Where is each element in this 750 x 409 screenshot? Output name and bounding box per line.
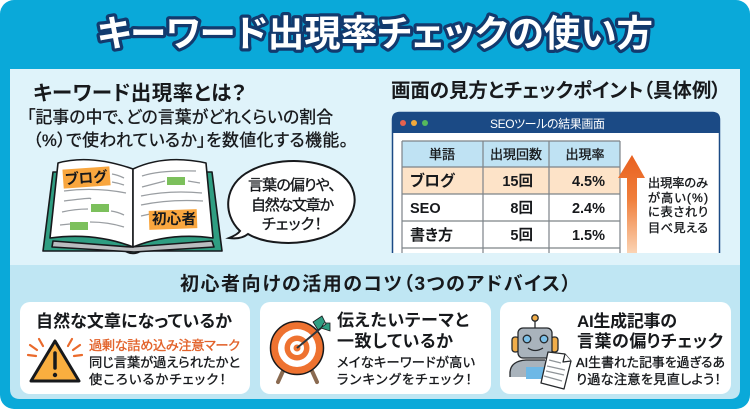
text block: arrow note: に表されり <box>648 205 708 219</box>
card heading: 言葉の偏りチェック <box>577 332 723 351</box>
table: 単語 <box>429 147 455 162</box>
card heading: 自然な文章になっているか <box>36 311 232 331</box>
card heading: AI生成記事の <box>577 311 677 331</box>
label: beginner: 初心者 <box>152 211 196 228</box>
card heading <box>337 311 469 351</box>
heading: what is keyword density: キーワード出現率とは？ <box>33 82 246 105</box>
card: natural writing <box>20 302 250 394</box>
arrow: rising rate <box>618 155 645 253</box>
card text <box>337 354 475 387</box>
icon: target with arrow <box>270 316 330 382</box>
card text: 使ころいるかチェック！ <box>89 371 226 387</box>
panel: tips <box>10 265 740 399</box>
table: 5回 <box>510 228 533 244</box>
window title: SEOツールの結果画面 <box>490 117 605 131</box>
label: blog: ブログ <box>64 167 109 188</box>
table: 4.5% <box>572 174 605 190</box>
icon: robot with document <box>510 315 571 389</box>
callout: speech bubble: チェック！ <box>262 216 322 233</box>
text block: arrow note: 出現率のみ <box>648 176 708 190</box>
table <box>402 141 620 260</box>
text block: definition: 「記事の中で、どの言葉がどれくらいの割合 <box>27 108 333 127</box>
icon: open book <box>43 160 222 254</box>
card heading: 伝えたいテーマと <box>337 311 469 330</box>
text block: arrow note <box>648 176 708 235</box>
callout: speech bubble: 自然な文章か <box>251 197 334 214</box>
icon: warning triangle <box>28 339 82 381</box>
text block: arrow note: 目べ見える <box>648 221 708 235</box>
table: SEO <box>410 201 441 217</box>
card text <box>576 355 725 387</box>
card text: AI生書れた記事を過ぎるあ <box>576 355 725 370</box>
table: 1.5% <box>572 228 605 244</box>
card text: メイなキーワードが高い <box>337 354 475 370</box>
card text <box>89 355 240 387</box>
card text: り過な注意を見直しよう！ <box>576 372 721 387</box>
callout: speech bubble <box>228 161 355 243</box>
table: 15回 <box>502 174 533 190</box>
card text: 同じ言葉が過えられたかと <box>89 355 240 370</box>
text block: definition: （%）で使われているか」を数値化する機能。 <box>33 130 348 150</box>
table: 8回 <box>510 201 533 217</box>
panel: upper explanation <box>10 69 740 272</box>
card heading <box>577 311 723 351</box>
title: キーワード出現率チェックの使い方 <box>97 13 653 54</box>
text block: definition <box>27 108 348 150</box>
heading: screen guide: 画面の見方とチェックポイント（具体例） <box>391 79 721 102</box>
text block: arrow note: が高い(%) <box>648 190 708 205</box>
callout: speech bubble: 言葉の偏りや、 <box>248 177 336 194</box>
card: AI article <box>500 302 731 394</box>
card heading: 一致しているか <box>337 332 453 351</box>
table: 2.4% <box>572 201 605 217</box>
window buttons <box>400 120 428 126</box>
heading: tips: 初心者向けの活用のコツ（3つのアドバイス） <box>180 273 571 295</box>
panel: SEO tool window <box>392 112 720 253</box>
card text: ランキングをチェック！ <box>337 372 472 387</box>
warning label: 過剰な詰め込み注意マーク <box>89 338 240 353</box>
table: ブログ <box>410 171 456 190</box>
table: 出現回数 <box>490 147 542 162</box>
card: theme match <box>260 302 491 394</box>
table: 出現率 <box>565 147 605 162</box>
table: 書き方 <box>410 226 453 244</box>
